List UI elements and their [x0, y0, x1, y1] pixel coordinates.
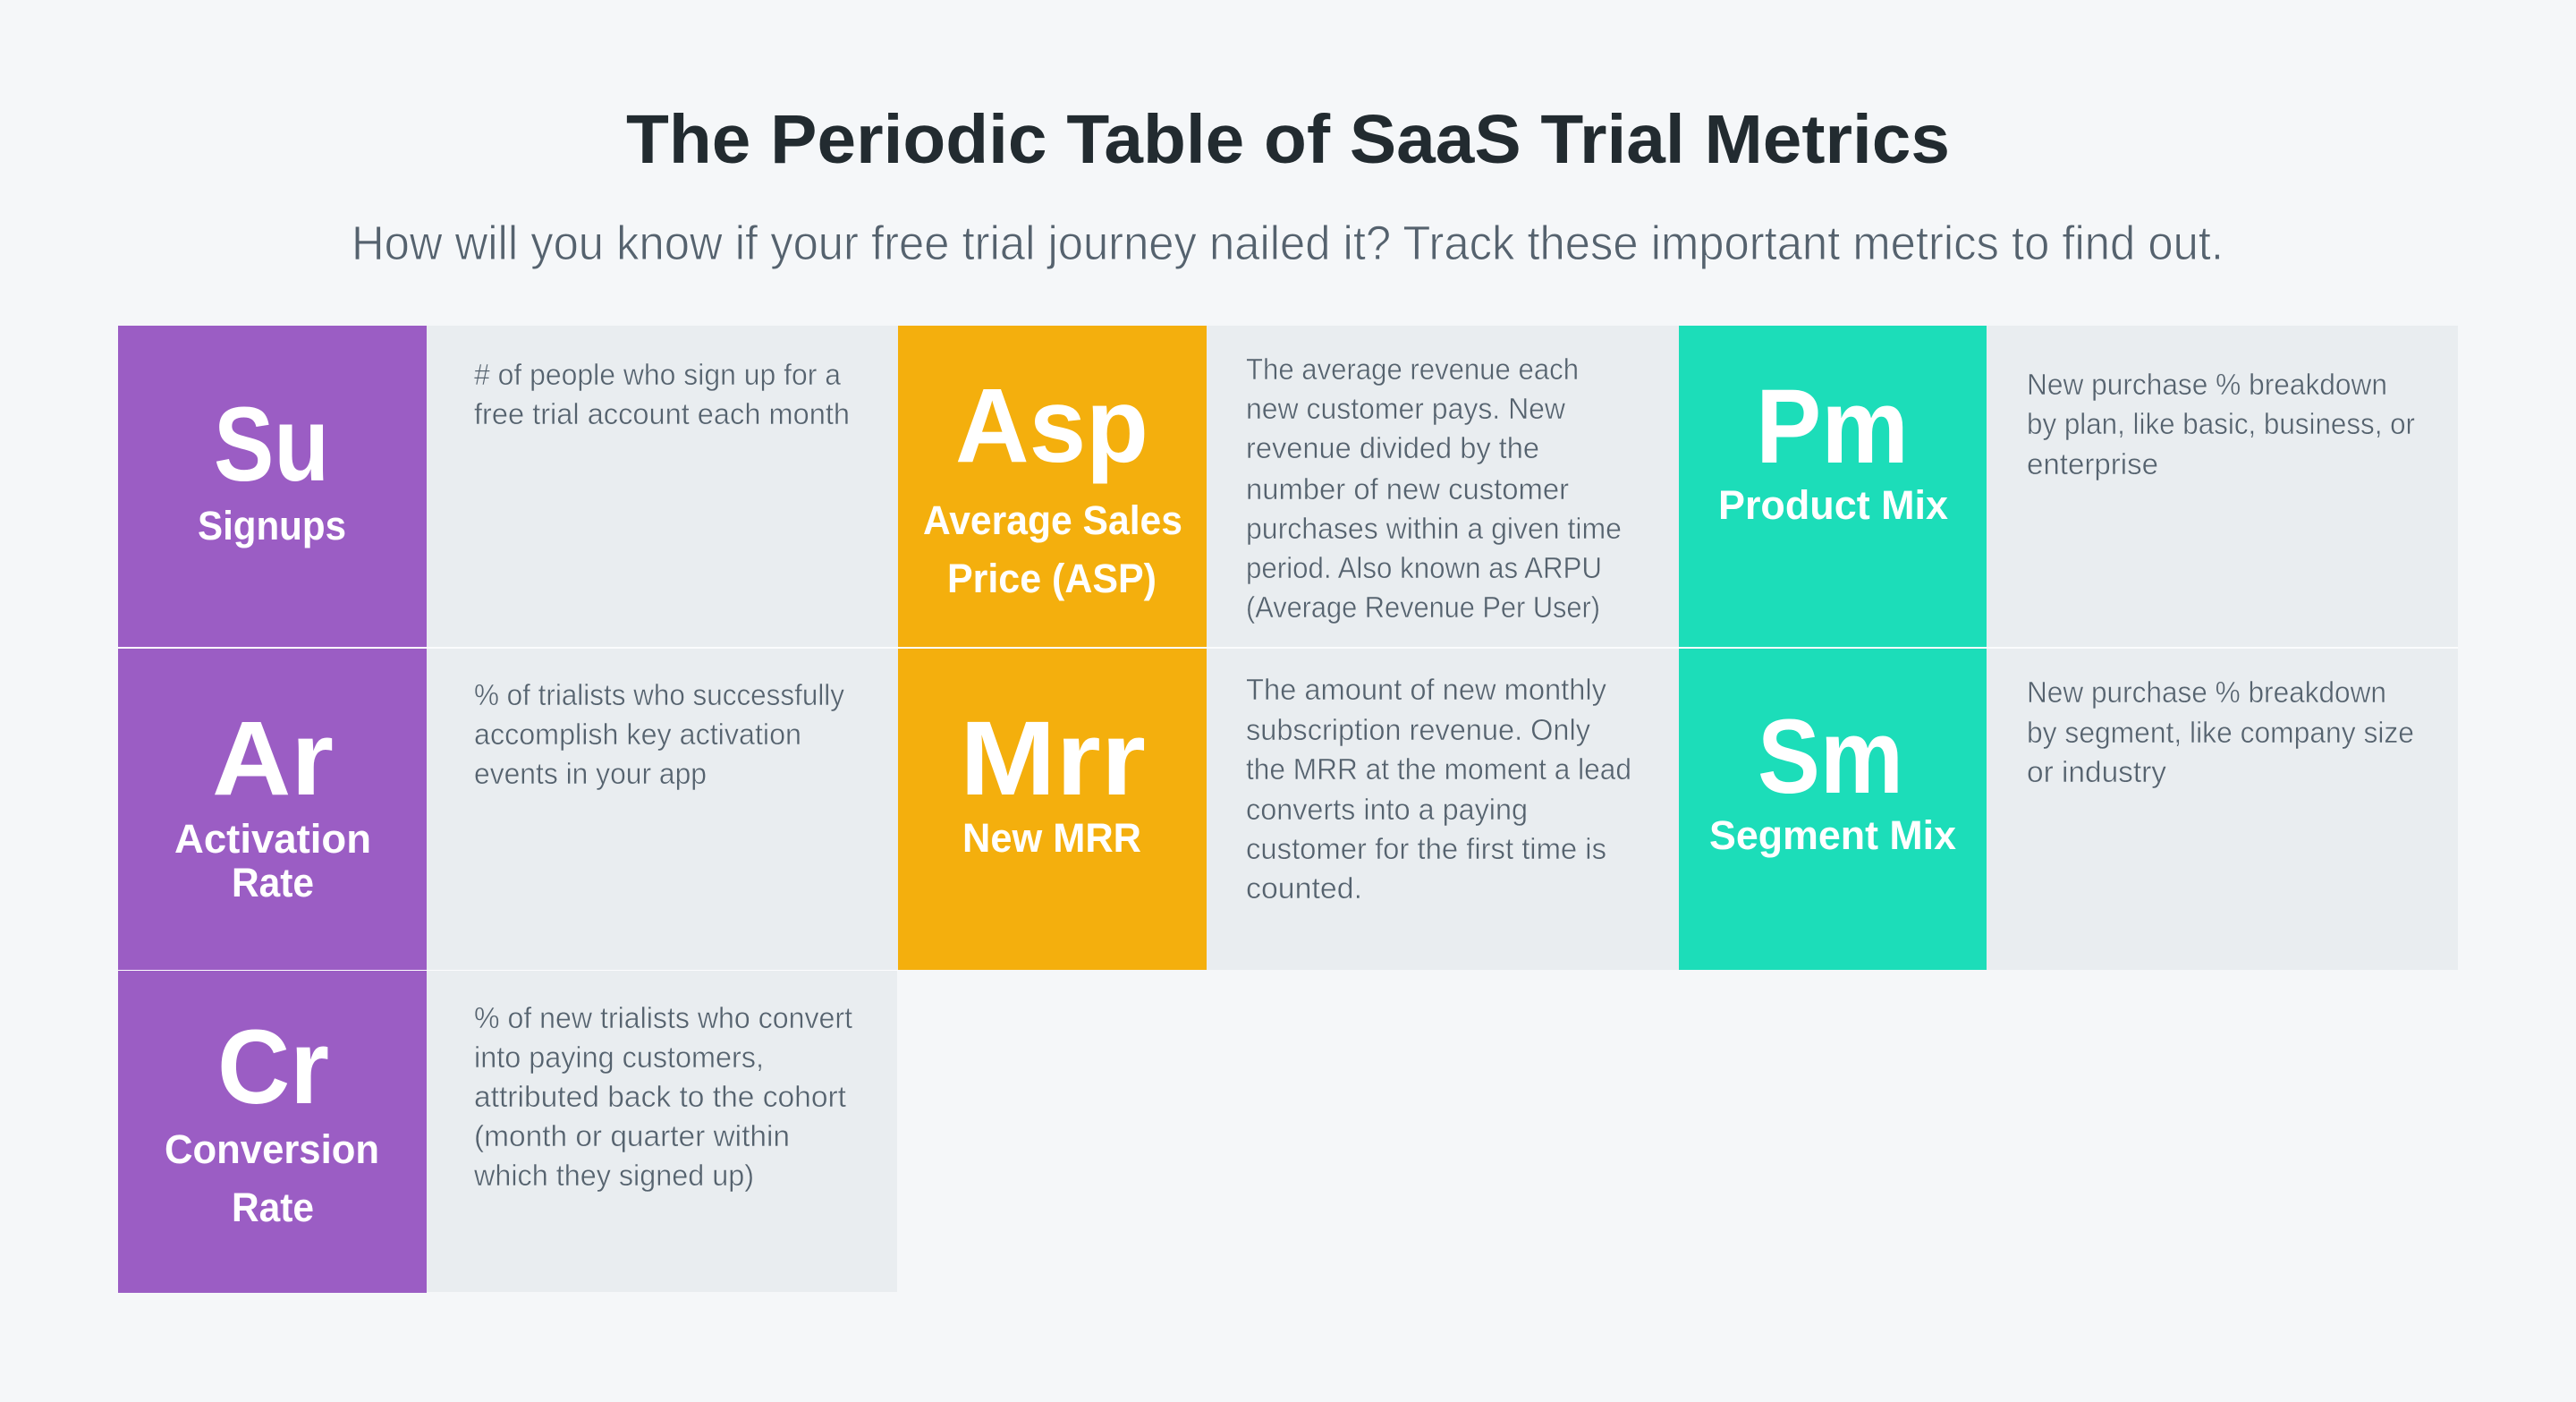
panel: Signups: [118, 326, 898, 647]
label: New MRR: New MRR: [962, 815, 1141, 861]
description: Conversion Rate: which they signed up): [473, 1159, 754, 1192]
label: Conversion Rate: Conversion: [165, 1126, 379, 1172]
description: Average Sales Price: [1246, 353, 1622, 624]
description: New MRR: [1246, 673, 1631, 905]
label: Activation Rate: [174, 816, 371, 905]
label: Conversion Rate: Rate: [232, 1185, 314, 1230]
symbol: Pm: Pm: [1756, 368, 1909, 486]
label: Average Sales Price (ASP): Price (ASP): [947, 556, 1157, 601]
description: New MRR: customer for the first time is: [1246, 832, 1606, 865]
description: Average Sales Price: revenue divided by the: [1246, 431, 1539, 464]
description: New MRR: counted.: [1246, 871, 1362, 905]
description: Signups: free trial account each month: [474, 397, 850, 430]
description: Average Sales Price: number of new customer: [1246, 472, 1569, 506]
panel: New MRR: [898, 649, 1679, 970]
description: Activation Rate: events in your app: [474, 757, 707, 790]
description: New MRR: the MRR at the moment a lead: [1246, 752, 1631, 786]
description: Product Mix: New purchase % breakdown: [2027, 368, 2387, 401]
description: Conversion Rate: into paying customers,: [474, 1041, 764, 1074]
panel: Average Sales Price: [898, 326, 1679, 647]
description: Conversion Rate: % of new trialists who convert: [474, 1001, 852, 1034]
symbol: Mrr: Mrr: [960, 700, 1146, 818]
label: Average Sales Price (ASP): Average Sales: [923, 497, 1182, 543]
symbol: Sm: Sm: [1758, 698, 1903, 816]
label: Conversion Rate: [165, 1126, 379, 1230]
description: Average Sales Price: The average revenue each: [1246, 353, 1579, 386]
description: Signups: # of people who sign up for a: [474, 358, 842, 391]
label: Activation Rate: Rate: [232, 860, 314, 905]
label: Average Sales Price (ASP): [923, 497, 1182, 601]
description: Average Sales Price: (Average Revenue Per User): [1246, 591, 1600, 624]
description: New MRR: subscription revenue. Only: [1246, 713, 1590, 746]
description: Conversion Rate: attributed back to the cohort: [474, 1080, 846, 1113]
description: Conversion Rate: (month or quarter within: [474, 1119, 790, 1152]
symbol: Asp: Asp: [955, 367, 1148, 485]
symbol: Cr: Cr: [217, 1008, 329, 1126]
description: Product Mix: by plan, like basic, business, or: [2027, 407, 2415, 440]
description: Average Sales Price: period. Also known as ARPU: [1246, 551, 1602, 584]
panel: Segment Mix: [1679, 649, 2458, 970]
description: Activation Rate: [474, 678, 844, 790]
panel: Activation Rate: [118, 649, 898, 970]
description: Signups: [474, 358, 850, 430]
description: Segment Mix: by segment, like company size: [2027, 716, 2414, 749]
description: Activation Rate: % of trialists who successfully: [474, 678, 844, 711]
title: The Periodic Table of SaaS Trial Metrics: [626, 101, 1950, 178]
label: Activation Rate: Activation: [174, 816, 371, 862]
description: Segment Mix: or industry: [2027, 755, 2167, 788]
description: Conversion Rate: [473, 1001, 852, 1192]
description: New MRR: converts into a paying: [1246, 793, 1528, 826]
description: Average Sales Price: purchases within a given time: [1246, 512, 1622, 545]
label: Product Mix: Product Mix: [1718, 482, 1948, 528]
description: Average Sales Price: new customer pays. New: [1246, 392, 1565, 425]
symbol: Ar: Ar: [212, 700, 334, 818]
description: Product Mix: [2027, 368, 2415, 480]
description: Segment Mix: New purchase % breakdown: [2027, 676, 2386, 709]
description: New MRR: The amount of new monthly: [1246, 673, 1606, 706]
label: Segment Mix: Segment Mix: [1709, 812, 1956, 858]
panel: Product Mix: [1679, 326, 2458, 647]
subtitle: How will you know if your free trial journey nailed it? Track these important metrics to find out.: [352, 217, 2224, 270]
label: Signups: Signups: [198, 503, 346, 548]
description: Product Mix: enterprise: [2027, 447, 2158, 480]
panel: Conversion Rate: [118, 971, 897, 1293]
description: Activation Rate: accomplish key activation: [474, 718, 801, 751]
description: Segment Mix: [2027, 676, 2414, 788]
symbol: Su: Su: [214, 386, 329, 504]
